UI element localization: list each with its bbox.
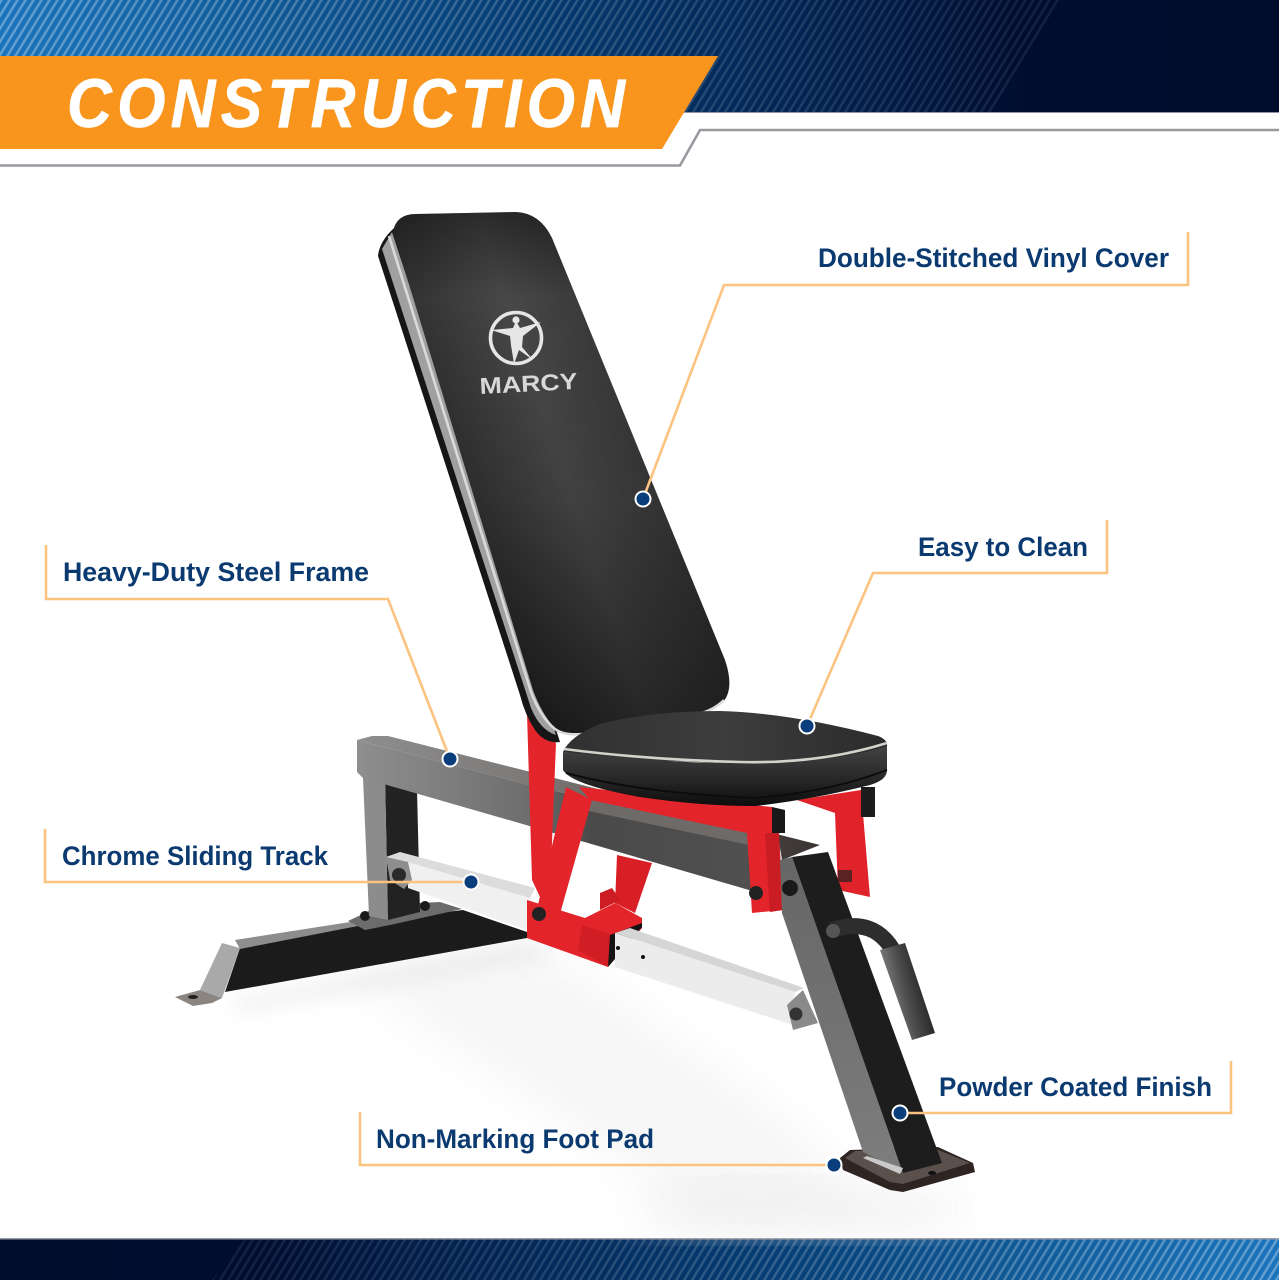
floor shadow [230, 938, 970, 1228]
callout: Chrome Sliding Track: Chrome Sliding Track [62, 841, 329, 871]
bench illustration [175, 212, 975, 1192]
seat pad [563, 711, 887, 806]
backrest pad [378, 212, 729, 742]
rear chrome rail [386, 852, 535, 930]
front chrome rail [615, 928, 818, 1030]
red upright [527, 713, 562, 897]
front leg [780, 852, 975, 1192]
Marcy logo [479, 312, 578, 399]
red strut [536, 787, 592, 928]
callout: Heavy-Duty Steel Frame [46, 545, 458, 766]
callout: Powder Coated Finish [892, 1061, 1231, 1120]
rear red strut [615, 855, 652, 913]
rear seat bracket [797, 787, 875, 897]
callout: Easy to Clean [800, 520, 1107, 734]
callout: Easy to Clean: Easy to Clean [918, 532, 1088, 562]
Marcy logo: MARCY [479, 368, 578, 399]
red slider block [527, 888, 642, 967]
callout: Chrome Sliding Track [45, 829, 478, 890]
bottom band [0, 1238, 1279, 1280]
foot pad [840, 1147, 975, 1192]
title banner [0, 56, 718, 149]
callout: Non-Marking Foot Pad [360, 1112, 842, 1172]
callout: Heavy-Duty Steel Frame: Heavy-Duty Steel Frame [63, 557, 369, 587]
callout: Powder Coated Finish: Powder Coated Finish [939, 1072, 1212, 1102]
main steel beam [357, 736, 820, 897]
top header band [0, 0, 1279, 166]
title banner: CONSTRUCTION [67, 65, 627, 142]
rear foot bar [175, 901, 527, 1006]
rear upright [363, 778, 420, 920]
under-seat rail [584, 800, 750, 845]
callout: Double-Stitched Vinyl Cover [636, 232, 1188, 506]
seat frame [579, 787, 785, 913]
callout: Non-Marking Foot Pad: Non-Marking Foot Pad [376, 1124, 654, 1154]
plate handle [826, 924, 935, 1040]
callout: Double-Stitched Vinyl Cover: Double-Stitched Vinyl Cover [818, 243, 1169, 273]
